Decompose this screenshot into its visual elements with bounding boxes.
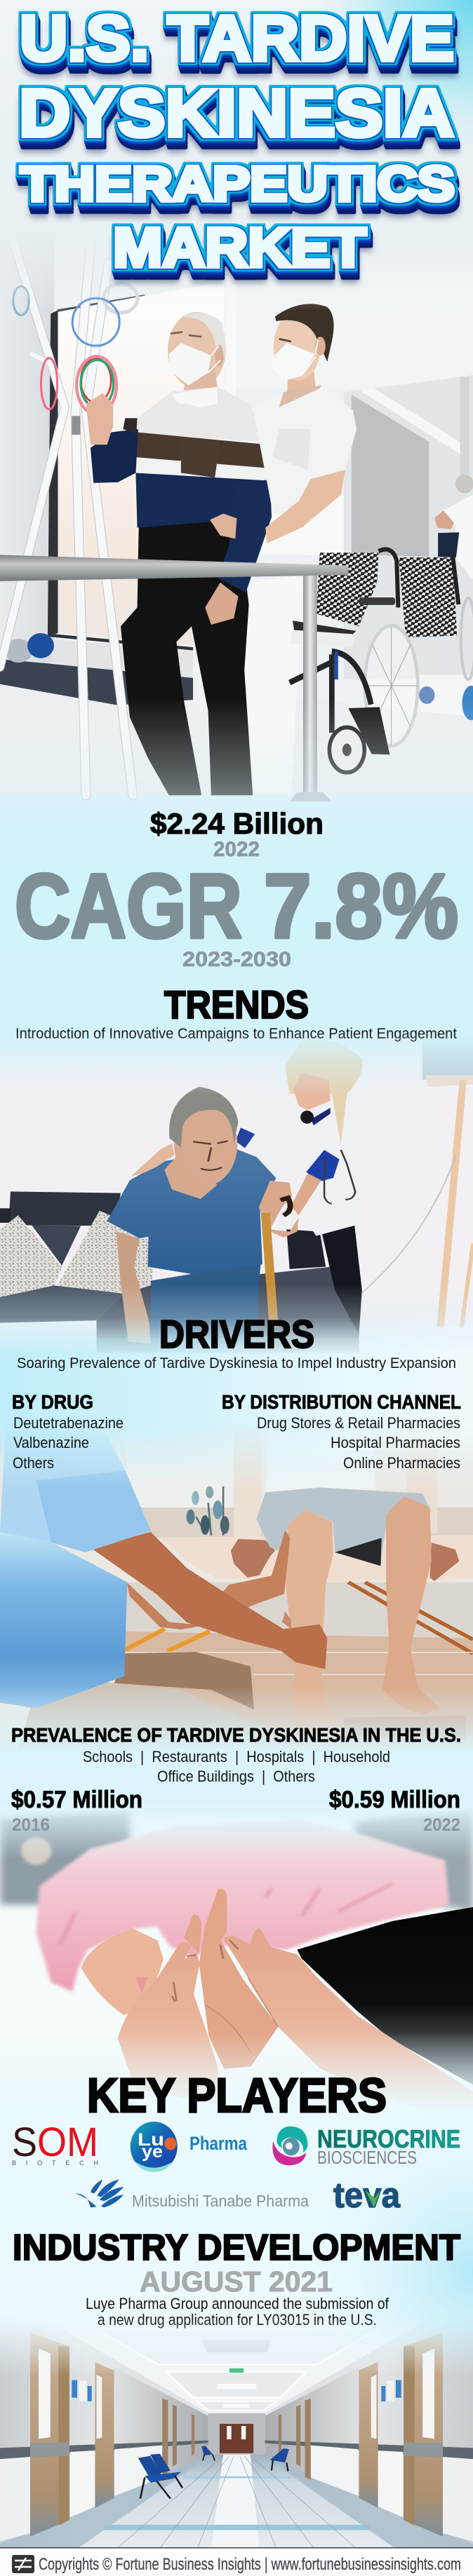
photo: therapist treating patient leg [0,1436,473,1747]
photo: nurse helping elderly man with cane [0,1026,473,1353]
logo: Mitsubishi Tanabe Pharma [75,2179,309,2210]
CAGR stat [15,855,458,971]
prevalence values: 2022 [423,1815,460,1835]
by drug: BY DRUG [12,1391,93,1413]
therapist [0,1433,327,1742]
industry development: Luye Pharma Group announced the submission of [86,2295,389,2312]
prevalence heading and categories: Schools | Restaurants | Hospitals | Household [83,1748,390,1765]
prevalence values: $0.57 Million [11,1787,142,1813]
mirror reflection figure [434,475,473,579]
CAGR stat: CAGR [15,855,242,957]
black trousers [297,1907,473,2084]
prevalence heading and categories: Office Buildings | Others [157,1768,315,1785]
by drug: Others [13,1454,54,1472]
prevalence values [11,1787,460,1835]
photo: rehabilitation therapist with elderly patient [0,232,473,801]
title line 4: MARKET [113,217,366,278]
wheelchair [290,550,473,773]
photo: hospital corridor [0,2293,473,2549]
by distribution channel [222,1391,461,1472]
seated man [107,1087,299,1353]
market size stat: $2.24 Billion [150,807,324,840]
logo: Luye Pharma: Pharma [189,2133,248,2154]
CAGR stat: 7.8% [264,855,458,957]
by drug: Deutetrabenazine [13,1414,124,1432]
white stand and rings [0,232,138,795]
footer logo [12,2555,34,2573]
pink shirt [36,1821,449,1992]
title line 2: DYSKINESIA [19,76,454,151]
therapist [210,304,357,795]
trends: TRENDS [164,982,309,1026]
nurse [235,1039,372,1334]
industry development: a new drug application for LY03015 in the U.S. [98,2311,377,2328]
parallel bar rail [0,555,348,801]
by drug [12,1391,124,1472]
logo: SOM Biotech: SOM [12,2120,98,2165]
sofa [0,1191,359,1353]
logo: Neurocrine Biosciences: BIOSCIENCES [317,2147,417,2168]
waiting chairs [138,2446,289,2499]
prevalence values: $0.59 Million [329,1787,460,1813]
corridor shell [0,2293,473,2549]
footer [0,2547,473,2576]
logo: Teva: teva [333,2176,401,2215]
handrails [0,2441,473,2542]
clinic room [0,1437,473,1747]
doors [30,2333,443,2537]
photo: hand massage [0,1810,473,2102]
prevalence heading and categories [11,1724,461,1785]
ceiling lights [93,2328,380,2411]
market size stat: 2022 [213,838,260,861]
industry development: INDUSTRY DEVELOPMENT [13,2228,460,2268]
drivers [17,1312,456,1371]
room [0,1026,473,1353]
logo: Neurocrine Biosciences [272,2124,460,2168]
hands [81,1889,473,2127]
logo: Luye Pharma [131,2122,248,2171]
market size stat [150,807,324,861]
patient [230,1444,459,1715]
title line 3: THERAPEUTICS [20,156,455,211]
logo: Luye Pharma: ye [142,2142,163,2162]
logo: Luye Pharma: Lu [138,2130,164,2150]
logo: Mitsubishi Tanabe Pharma: Mitsubishi Tanabe Pharma [132,2192,309,2210]
industry development [13,2228,460,2328]
trends [15,982,457,1042]
logo: SOM Biotech: BIOTECH [12,2160,98,2167]
wall and room [0,232,473,795]
industry development: AUGUST 2021 [140,2265,333,2298]
trends: Introduction of Innovative Campaigns to Enhance Patient Engagement [15,1026,457,1042]
drivers: DRIVERS [159,1312,314,1356]
by distribution channel: Hospital Pharmacies [331,1434,460,1451]
drivers: Soaring Prevalence of Tardive Dyskinesia to Impel Industry Expansion [17,1355,456,1371]
by drug: Valbenazine [13,1434,89,1451]
key players heading: KEY PLAYERS [87,2068,387,2122]
blurred background [0,1810,473,2068]
title line 1: U.S. TARDIVE [20,3,454,74]
elderly patient [86,312,272,795]
prevalence values: 2016 [12,1815,50,1835]
end door [220,2424,253,2453]
by distribution channel: Online Pharmacies [343,1454,460,1472]
wall signs [72,2380,401,2401]
CAGR stat: 2023-2030 [182,948,291,971]
